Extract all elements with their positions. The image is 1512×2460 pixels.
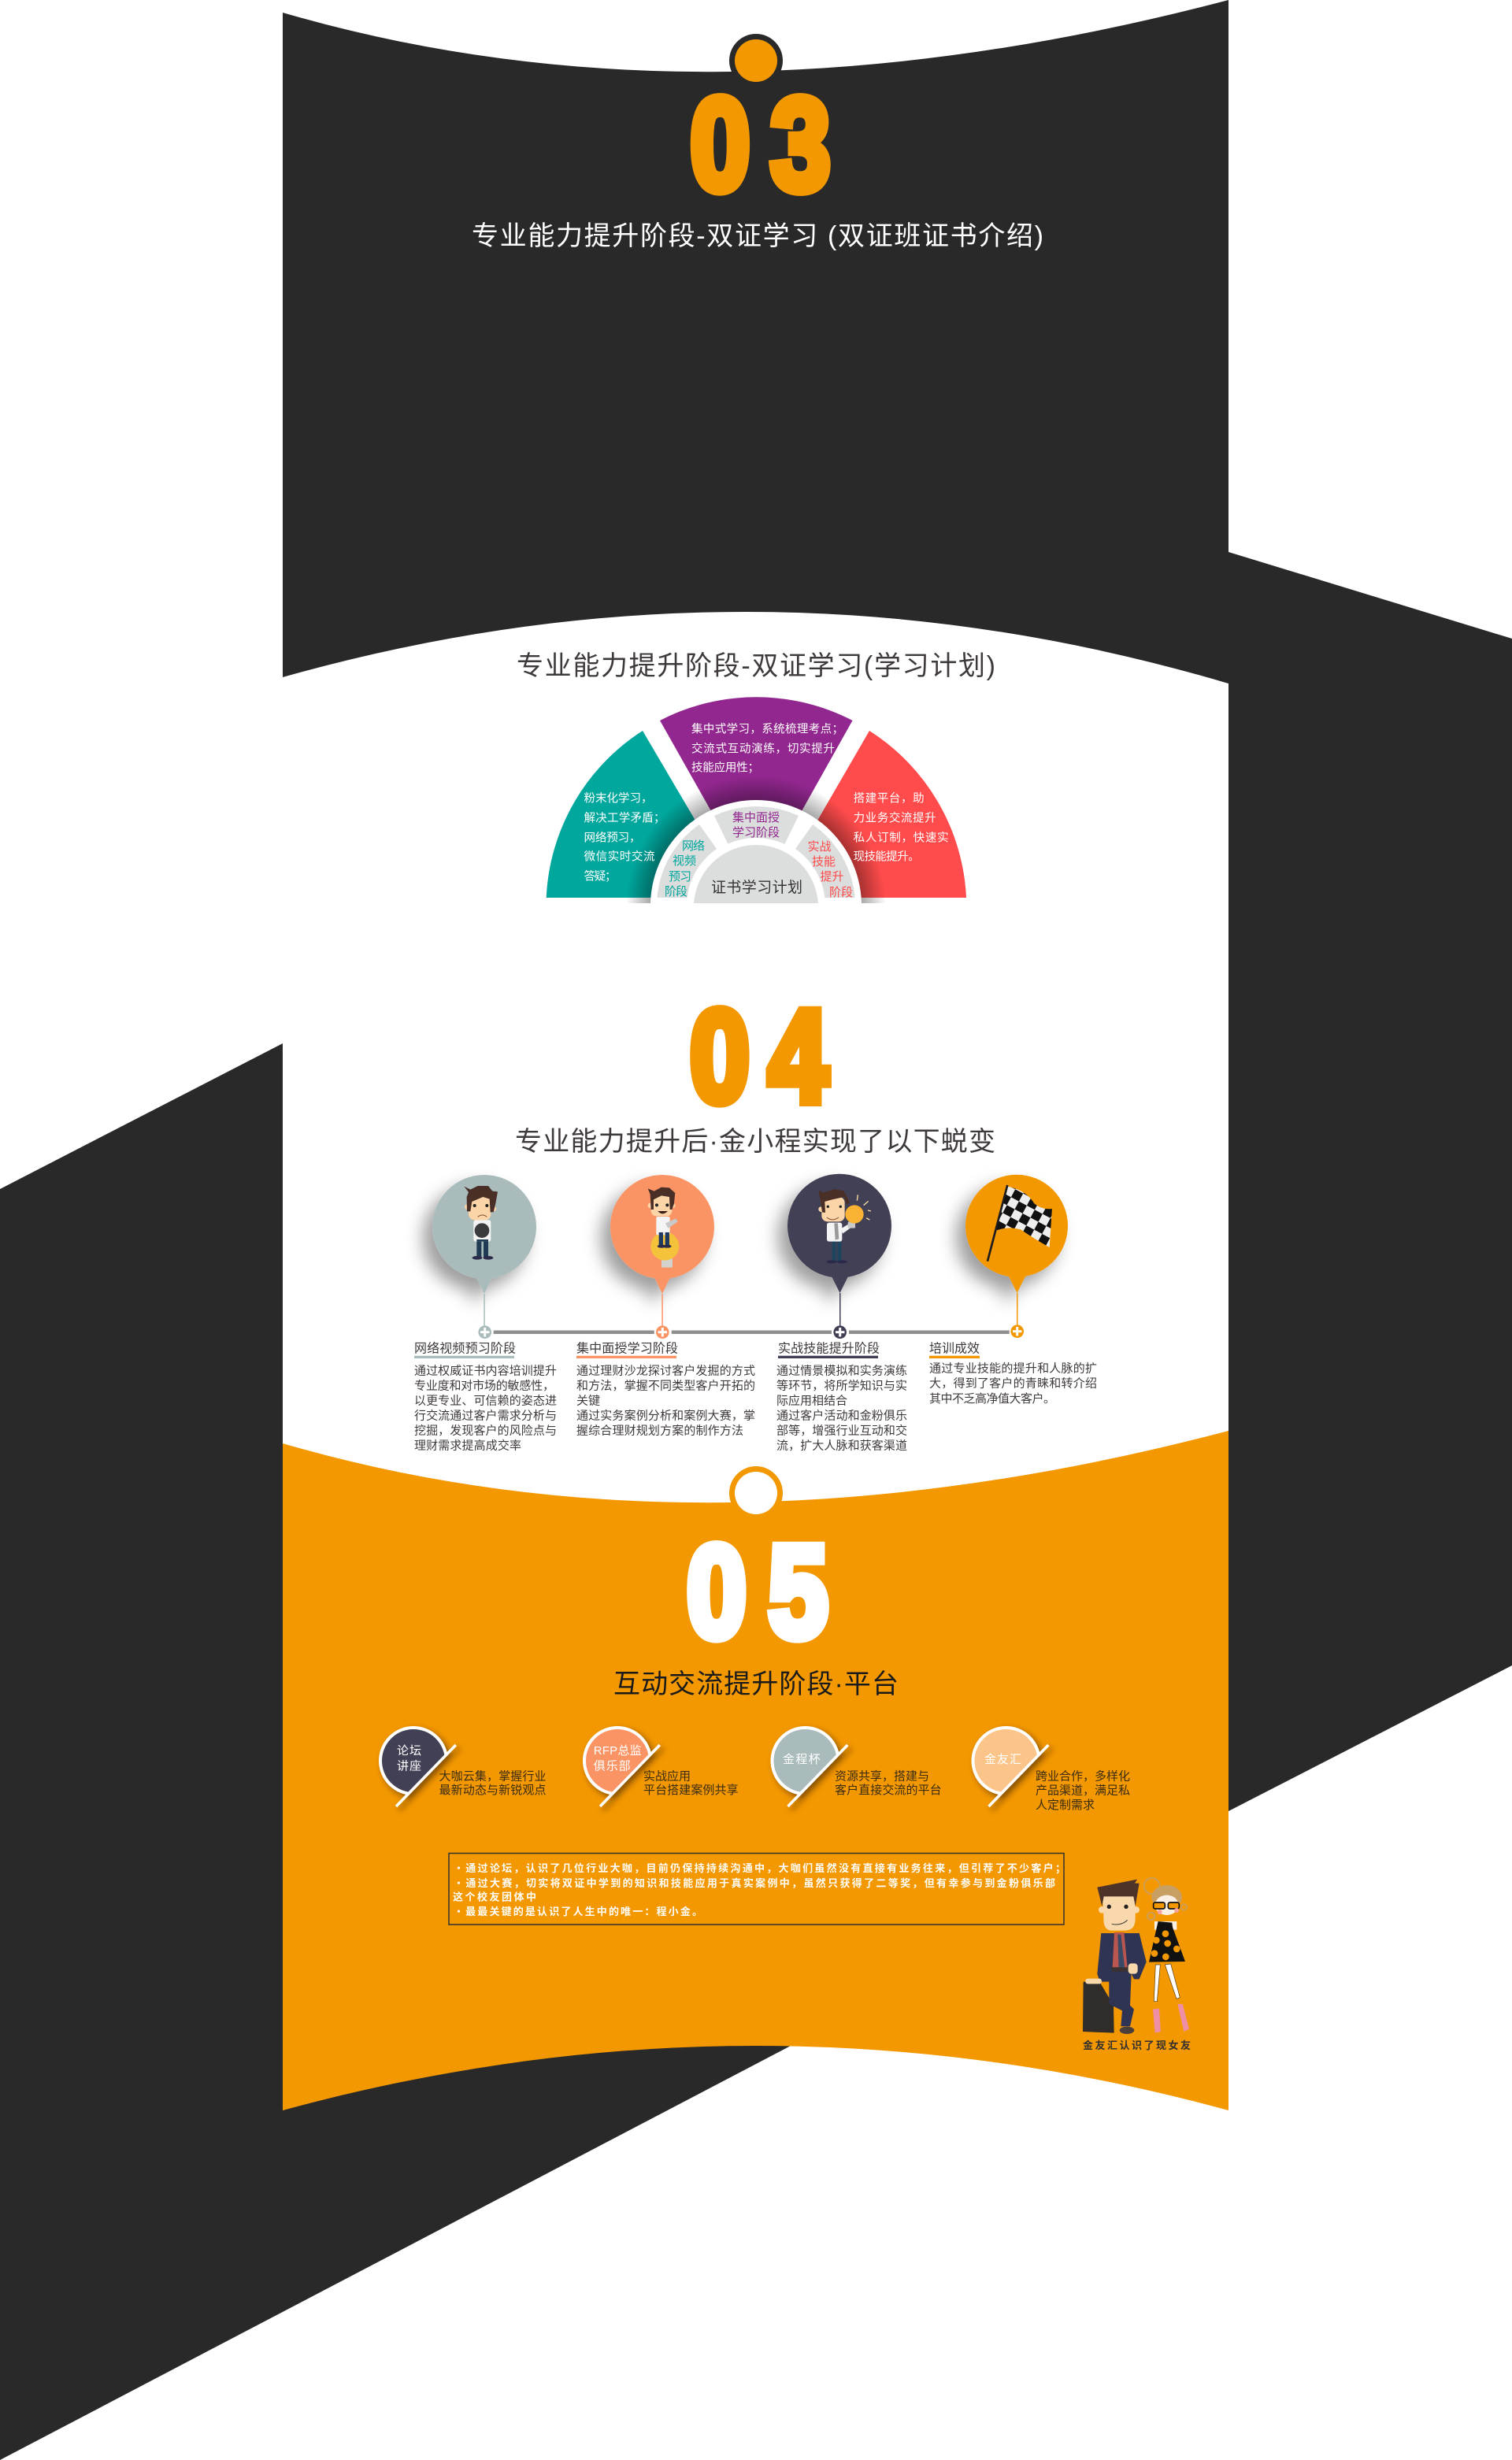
panel: section 05 orange [283, 1431, 1228, 2110]
badge: RFP club: 俱乐部 [594, 1760, 631, 1773]
badge: Jincheng cup: 资源共享，搭建与 [835, 1770, 929, 1783]
column: online video stage: 专业度和对市场的敏感性， [414, 1379, 554, 1392]
panel: section 03 dark header [283, 0, 1228, 684]
column: intensive stage [576, 1342, 755, 1437]
number 05: 0 [687, 1520, 747, 1665]
column: online video stage: 以更专业、可信赖的姿态进 [414, 1394, 557, 1407]
number 05 [687, 1520, 828, 1665]
badge: forum: 论坛 [397, 1744, 421, 1758]
column: online video stage: 通过权威证书内容培训提升 [414, 1364, 557, 1377]
icon: checkered flag [986, 1184, 1052, 1261]
badge: RFP club: 平台搭建案例共享 [643, 1783, 739, 1797]
text: purple wedge [691, 723, 843, 775]
text: teal wedge [584, 792, 665, 884]
icon: man standing on light bulb [648, 1187, 679, 1268]
section 05 marker dot [729, 1466, 783, 1520]
icon: man holding light bulb [818, 1189, 871, 1263]
heading: study plan: 专业能力提升阶段-双证学习(学习计划) [517, 651, 995, 681]
text: red wedge: 现技能提升。 [854, 850, 920, 863]
label: online stage [665, 839, 705, 898]
text: teal wedge: 答疑； [584, 869, 616, 884]
label: chart centre: 证书学习计划 [711, 879, 802, 896]
text: teal wedge: 网络预习， [584, 832, 641, 844]
badge: alumni club: 人定制需求 [1036, 1799, 1095, 1812]
callout: summary box: 这个校友团体中 [453, 1891, 536, 1902]
label: practice stage: 技能 [812, 855, 836, 869]
section 03 marker dot [729, 34, 783, 87]
badge: Jincheng cup: 客户直接交流的平台 [835, 1783, 942, 1797]
badge: alumni club [973, 1728, 1130, 1812]
column: training results: 培训成效 [929, 1342, 980, 1356]
column: intensive stage: 通过实务案例分析和案例大赛，掌 [576, 1408, 755, 1422]
badge: alumni club: 产品渠道，满足私 [1036, 1784, 1130, 1797]
label: practice stage [808, 840, 853, 899]
column: intensive stage: 握综合理财规划方案的制作方法 [576, 1423, 743, 1437]
heading: section 05: 互动交流提升阶段·平台 [613, 1669, 899, 1699]
text: red wedge: 搭建平台，助 [854, 792, 925, 805]
column: practical skill stage: 等环节，将所学知识与实 [776, 1378, 907, 1392]
label: intensive stage [732, 811, 780, 839]
column: practical skill stage: 部等，增强行业互动和交 [776, 1423, 907, 1437]
text: purple wedge: 技能应用性； [691, 761, 759, 775]
column: practical skill stage: 通过情景模拟和实务演练 [776, 1364, 907, 1377]
column: training results [929, 1342, 1097, 1406]
label: practice stage: 提升 [821, 870, 844, 884]
number 03: 0 [691, 72, 750, 218]
pin: grey teal with sad man [432, 1175, 536, 1339]
badge: alumni club: 跨业合作，多样化 [1036, 1770, 1130, 1783]
text: red wedge [854, 792, 949, 863]
label: intensive stage: 集中面授 [732, 811, 780, 824]
wedge: purple intensive learning [660, 697, 852, 811]
column: practical skill stage: 际应用相结合 [776, 1393, 847, 1407]
column: online video stage: 网络视频预习阶段 [414, 1341, 516, 1356]
text: purple wedge: 交流式互动演练，切实提升 [691, 742, 835, 756]
text: teal wedge: 解决工学矛盾； [584, 811, 665, 825]
pin: orange with man on bulb [610, 1175, 714, 1339]
wedge: teal fragmented learning [547, 731, 695, 898]
column: online video stage: 理财需求提高成交率 [414, 1438, 521, 1452]
badge: RFP club [584, 1728, 739, 1806]
callout: summary box: ・通过论坛，认识了几位行业大咖，目前仍保持持续沟通中，大咖们虽然没有直接有业务往来，但引荐了不少客户； [454, 1862, 1065, 1875]
badge: forum: 大咖云集，掌握行业 [439, 1770, 547, 1783]
column: practical skill stage [776, 1342, 907, 1452]
column: training results: 通过专业技能的提升和人脉的扩 [929, 1362, 1097, 1376]
column: intensive stage: 集中面授学习阶段 [576, 1342, 678, 1356]
panel: white middle section [283, 551, 1228, 1575]
badge: Jincheng cup: 金程杯 [783, 1753, 821, 1766]
text: purple wedge: 集中式学习，系统梳理考点； [691, 723, 843, 735]
column: intensive stage: 关键 [576, 1394, 600, 1407]
label: practice stage: 实战 [808, 840, 832, 854]
callout: summary box: ・通过大赛，切实将双证中学到的知识和技能应用于真实案例中，虽然只获得了二等奖，但有幸参与到金粉俱乐部 [454, 1877, 1055, 1889]
column: practical skill stage: 流，扩大人脉和获客渠道 [776, 1439, 907, 1452]
text: teal wedge: 粉末化学习， [584, 792, 652, 805]
number 03: 3 [771, 72, 830, 218]
column: training results: 大，得到了客户的青睐和转介绍 [929, 1377, 1097, 1391]
label: intensive stage: 学习阶段 [732, 826, 780, 839]
number 04: 4 [769, 984, 828, 1130]
text: red wedge: 力业务交流提升 [854, 811, 936, 825]
badge: Jincheng cup [772, 1728, 942, 1806]
callout: summary box: ・最最关键的是认识了人生中的唯一：程小金。 [454, 1906, 702, 1917]
badge: RFP club: 实战应用 [643, 1769, 691, 1783]
background shape: left dark band [0, 1043, 791, 2460]
number 05: 5 [769, 1520, 828, 1665]
text: red wedge: 私人订制，快速实 [854, 832, 949, 844]
badge: forum: 最新动态与新锐观点 [439, 1784, 547, 1797]
icon: suitcase [1083, 1982, 1114, 2033]
text: teal wedge: 微信实时交流 [584, 849, 655, 863]
heading: section 04: 专业能力提升后·金小程实现了以下蜕变 [515, 1127, 995, 1157]
badge: forum [380, 1728, 547, 1806]
number 04 [690, 984, 828, 1130]
badge: forum: 讲座 [397, 1760, 421, 1773]
callout: summary box [449, 1854, 1065, 1925]
pin: orange with checkered flag [965, 1173, 1068, 1338]
column: online video stage: 行交流通过客户需求分析与 [414, 1408, 557, 1422]
ring shadow and inner ring [628, 780, 884, 903]
column: practical skill stage: 通过客户活动和金粉俱乐 [776, 1409, 907, 1422]
badge: alumni club: 金友汇 [984, 1753, 1021, 1766]
background shape: right dark band [1228, 552, 1512, 1811]
label: online stage: 视频 [673, 854, 696, 868]
number 04: 0 [690, 984, 750, 1130]
column: training results: 其中不乏高净值大客户。 [929, 1392, 1055, 1406]
column: online video stage: 挖掘，发现客户的风险点与 [414, 1424, 557, 1437]
badge: RFP club: RFP总监 [594, 1744, 642, 1758]
label: online stage: 网络 [682, 839, 705, 853]
number 03 [691, 72, 830, 218]
pin: navy with idea man [788, 1174, 891, 1339]
icon: woman in polka dress [1144, 1878, 1189, 2033]
chart: study plan semicircle [547, 697, 966, 903]
label: online stage: 预习 [669, 870, 691, 884]
column: online video stage [414, 1341, 557, 1452]
illustration: couple [1083, 1878, 1189, 2034]
icon: sad man with ball [464, 1186, 498, 1260]
column: intensive stage: 和方法，掌握不同类型客户开拓的 [576, 1379, 755, 1392]
timeline bar [494, 1331, 1010, 1334]
label: practice stage: 阶段 [829, 886, 853, 899]
label: online stage: 阶段 [665, 885, 687, 898]
icon: man in suit [1085, 1880, 1147, 2034]
heading: section 03 subtitle: 专业能力提升阶段-双证学习 (双证班证书介绍) [472, 221, 1043, 251]
column: intensive stage: 通过理财沙龙探讨客户发掘的方式 [576, 1364, 755, 1377]
column: practical skill stage: 实战技能提升阶段 [778, 1342, 880, 1356]
caption: couple: 金友汇认识了现女友 [1083, 2040, 1191, 2051]
wedge: red custom platform [817, 731, 966, 898]
